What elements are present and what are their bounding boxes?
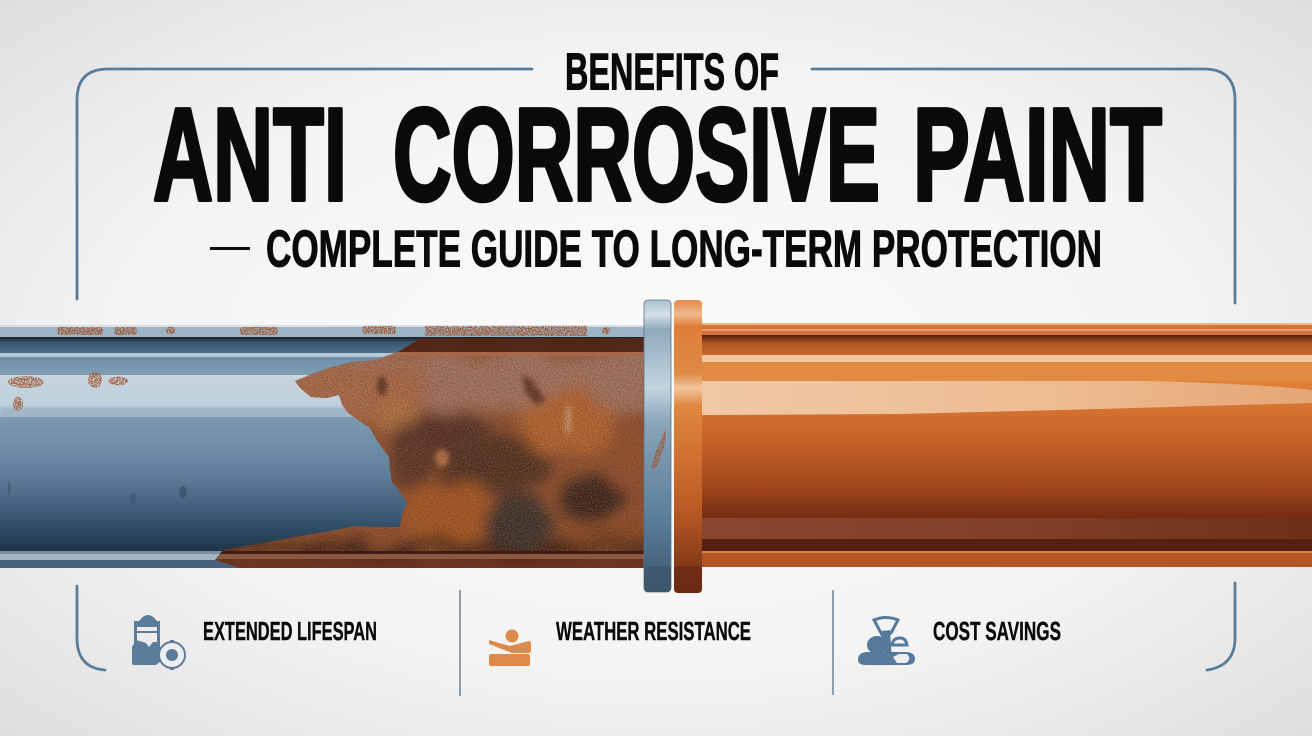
flange: blue <box>644 300 671 592</box>
icon: scale and savings <box>858 618 915 665</box>
dark chips in the blue paint <box>8 481 186 504</box>
benefit: weather resistance <box>489 616 751 666</box>
label: COST SAVINGS <box>933 616 1061 646</box>
rust specks on the blue paint <box>8 326 610 411</box>
main title: CORROSIVE <box>393 81 880 228</box>
icon: orange blocks <box>489 630 531 666</box>
new orange pipe <box>702 323 1312 567</box>
benefit: cost savings <box>858 616 1061 665</box>
main title: ANTI <box>153 81 347 228</box>
top frame <box>77 69 1235 303</box>
main title: PAINT <box>913 81 1162 228</box>
corroded pipe <box>0 325 660 570</box>
heading: benefits of: BENEFITS OF <box>565 44 779 102</box>
benefit: extended lifespan <box>132 615 377 670</box>
flange: orange <box>674 300 702 593</box>
title block <box>153 44 1162 278</box>
rust patch <box>215 338 644 568</box>
label: WEATHER RESISTANCE <box>556 616 751 646</box>
gloss highlight <box>702 381 1312 415</box>
label: EXTENDED LIFESPAN <box>203 616 377 646</box>
icon: paint can with target <box>132 615 185 670</box>
dividers <box>460 590 833 696</box>
dash <box>210 247 250 250</box>
bottom frame <box>77 583 1235 670</box>
